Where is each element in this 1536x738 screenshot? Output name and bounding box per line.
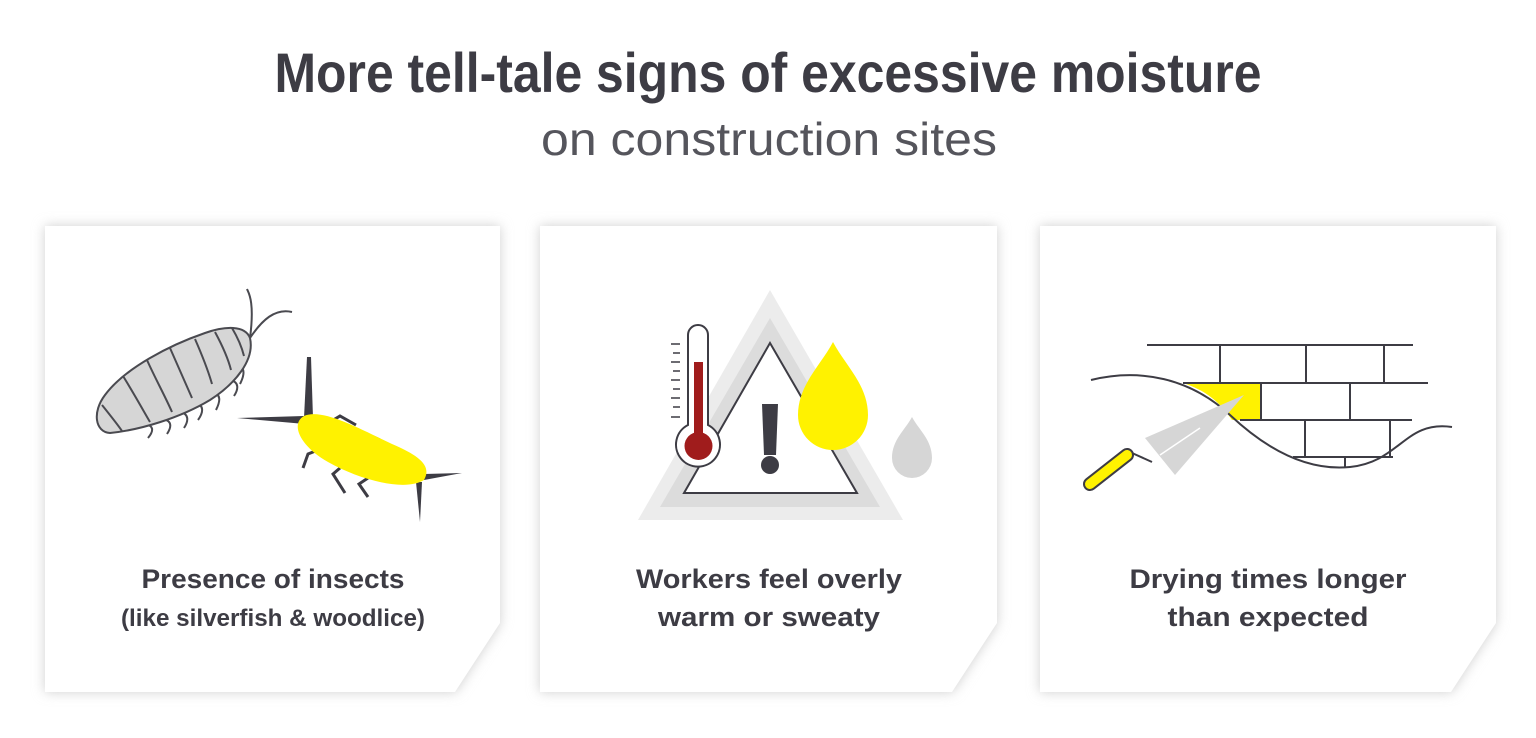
icon: bricks and trowel [1090, 345, 1452, 484]
panel: drying [1040, 226, 1496, 692]
title: More tell-tale signs of excessive moisture [274, 41, 1262, 104]
title [274, 41, 1262, 165]
panel: insects [45, 226, 500, 692]
caption: warm [636, 564, 902, 632]
caption: warm: warm or sweaty [657, 602, 880, 632]
caption: drying [1130, 564, 1407, 632]
icon: grey drop [892, 417, 932, 478]
icon: warning triangle [638, 290, 903, 520]
icon: thermometer [671, 325, 720, 467]
caption: warm: Workers feel overly [636, 564, 902, 594]
panel: warm [540, 226, 997, 692]
icon: silverfish [237, 357, 462, 522]
caption: insects: (like silverfish & woodlice) [121, 605, 425, 632]
caption: drying: Drying times longer [1130, 564, 1407, 594]
caption: insects [121, 564, 425, 632]
caption: drying: than expected [1168, 602, 1368, 632]
caption: insects: Presence of insects [142, 564, 404, 594]
icon: woodlouse [97, 289, 292, 438]
subtitle: on construction sites [541, 113, 997, 165]
icon: yellow drop [798, 342, 868, 450]
